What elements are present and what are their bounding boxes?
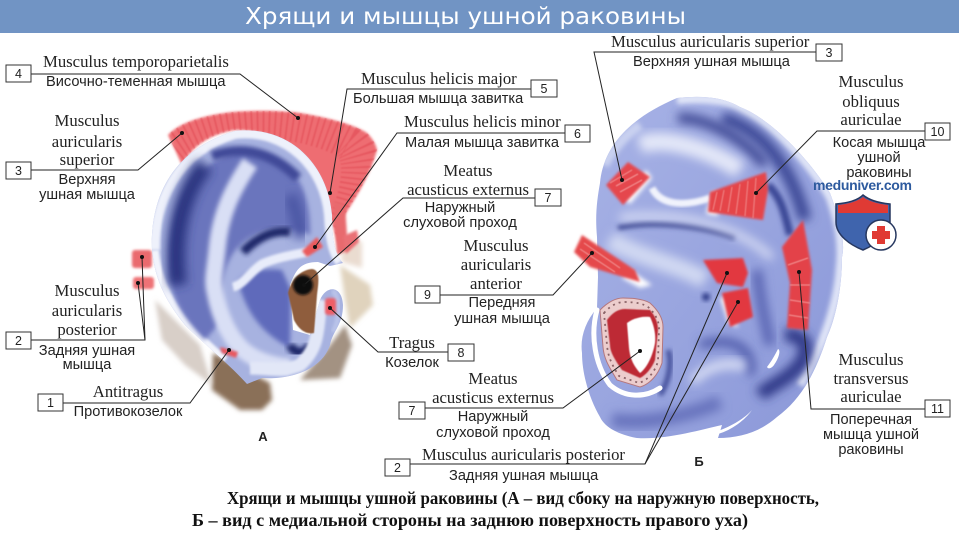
callout 7: Meatus acusticus externus (A): Наружный <box>425 200 495 216</box>
callout 2: Musculus auricularis posterior (A): auricularis <box>52 301 122 320</box>
callout 3: Musculus auricularis superior (A): Верхняя <box>59 172 115 188</box>
callout 1: Antitragus: 1 <box>47 396 54 410</box>
muscle: auricularis superior <box>606 162 652 205</box>
callout 3: Musculus auricularis superior (B): Верхняя ушная мышца <box>633 54 791 70</box>
caption: Хрящи и мышцы ушной раковины (А – вид сбоку на наружную поверхность, <box>227 488 819 508</box>
muscle: auricularis anterior <box>574 235 652 288</box>
callout 9: Musculus auricularis anterior: 9 <box>424 288 431 302</box>
caption: Б – вид с медиальной стороны на заднюю поверхность правого уха) <box>192 510 748 530</box>
callout 11: Musculus transversus auriculae <box>797 270 950 458</box>
callout 11: Musculus transversus auriculae: 11 <box>931 402 944 416</box>
muscle: transversus auriculae <box>782 220 812 330</box>
cartilage <box>152 130 343 384</box>
callout 8: Tragus: 8 <box>458 346 465 360</box>
muscle: tragus <box>325 298 336 315</box>
callout 10: Musculus obliquus auriculae: ушной <box>857 150 901 166</box>
muscles: auricularis posterior <box>132 250 154 289</box>
callout 7: Meatus acusticus externus (A) <box>302 161 561 287</box>
callout 2: Musculus auricularis posterior (A): 2 <box>15 334 22 348</box>
ear canal <box>288 269 318 333</box>
callout 8: Tragus: Tragus <box>389 333 435 352</box>
callout 2: Musculus auricularis posterior (B): 2 <box>394 461 401 475</box>
callout 2: Musculus auricularis posterior (A) <box>6 255 145 373</box>
callout 2: Musculus auricularis posterior (A): Задняя ушная <box>39 343 135 359</box>
muscle: helicis minor <box>302 237 323 257</box>
label: A: А <box>258 429 268 444</box>
white rim around meatus <box>594 310 660 395</box>
muscle: lower fan strip <box>333 200 348 255</box>
callout 3: Musculus auricularis superior (A): Musculus <box>55 111 119 130</box>
callout 11: Musculus transversus auriculae: transversus <box>833 369 909 388</box>
callout 3: Musculus auricularis superior (B) <box>594 32 842 182</box>
callout 5: Musculus helicis major: Musculus helicis major <box>361 69 517 88</box>
callout 3: Musculus auricularis superior (A): 3 <box>15 164 22 178</box>
callout 3: Musculus auricularis superior (B): Musculus auricularis superior <box>611 32 810 51</box>
callout 4: Musculus temporoparietalis <box>6 52 300 120</box>
callout 1: Antitragus: Antitragus <box>93 382 163 401</box>
callout 3: Musculus auricularis superior (A): superior <box>60 150 115 169</box>
callout 11: Musculus transversus auriculae: мышца ушной <box>823 427 919 443</box>
callout 10: Musculus obliquus auriculae: раковины <box>846 165 912 181</box>
callout 6: Musculus helicis minor: 6 <box>574 127 581 141</box>
callout 9: Musculus auricularis anterior: ушная мышца <box>454 311 551 327</box>
callout 9: Musculus auricularis anterior: Musculus <box>464 236 528 255</box>
callout 10: Musculus obliquus auriculae: Musculus <box>839 72 903 91</box>
callout 6: Musculus helicis minor: Малая мышца завитка <box>405 135 560 151</box>
callout 7: Meatus acusticus externus (B): acusticus externus <box>432 388 554 407</box>
watermark: meduniver.com: meduniver.com <box>813 177 912 193</box>
callout 10: Musculus obliquus auriculae: obliquus <box>842 92 900 111</box>
muscle: temporoparietalis fan <box>168 111 377 252</box>
callout 11: Musculus transversus auriculae: Поперечная <box>830 412 912 428</box>
callout 11: Musculus transversus auriculae: Musculus <box>839 350 903 369</box>
callout 6: Musculus helicis minor <box>313 112 590 249</box>
illustration: ear A lateral view <box>132 111 377 410</box>
callout 7: Meatus acusticus externus (A): 7 <box>545 191 552 205</box>
callout 2: Musculus auricularis posterior (A): Musculus <box>55 281 119 300</box>
callout 7: Meatus acusticus externus (B) <box>399 349 642 441</box>
callout 2: Musculus auricularis posterior (B): Musculus auricularis posterior <box>422 445 625 464</box>
callout 2: Musculus auricularis posterior (B): Задняя ушная мышца <box>449 468 599 484</box>
callout 9: Musculus auricularis anterior <box>415 236 594 327</box>
muscle: antitragus <box>220 347 238 358</box>
callout 5: Musculus helicis major: 5 <box>541 82 548 96</box>
callout 8: Tragus: Козелок <box>385 355 440 371</box>
callout 11: Musculus transversus auriculae: раковины <box>838 442 904 458</box>
callout 9: Musculus auricularis anterior: auricularis <box>461 255 531 274</box>
muscle: obliquus auriculae <box>706 172 768 220</box>
callout 2: Musculus auricularis posterior (A): мышца <box>63 357 112 373</box>
title bar <box>0 0 959 33</box>
callout 2: Musculus auricularis posterior (B) <box>385 271 740 484</box>
illustration: ear B medial view <box>574 97 843 438</box>
callout 10: Musculus obliquus auriculae <box>754 72 950 195</box>
callout 3: Musculus auricularis superior (A): auricularis <box>52 132 122 151</box>
callout 10: Musculus obliquus auriculae: 10 <box>931 125 944 139</box>
title bar: Хрящи и мышцы ушной раковины <box>245 4 686 30</box>
callout 4: Musculus temporoparietalis: Височно-теменная мышца <box>46 74 226 90</box>
callout 7: Meatus acusticus externus (B): Наружный <box>458 409 528 425</box>
callout 5: Musculus helicis major <box>328 69 557 195</box>
callout 3: Musculus auricularis superior (A): ушная мышца <box>39 187 136 203</box>
muscles: auricularis posterior <box>703 258 753 328</box>
callout 7: Meatus acusticus externus (A): слуховой проход <box>403 215 517 231</box>
surrounding tissue <box>155 238 373 410</box>
callout 3: Musculus auricularis superior (B): 3 <box>826 46 833 60</box>
callout 4: Musculus temporoparietalis: 4 <box>15 67 22 81</box>
slit near lobule <box>767 349 779 368</box>
callout 4: Musculus temporoparietalis: Musculus temporoparietalis <box>43 52 229 71</box>
callout 7: Meatus acusticus externus (B): 7 <box>409 404 416 418</box>
callout 3: Musculus auricularis superior (A) <box>6 111 184 203</box>
callout 2: Musculus auricularis posterior (A): posterior <box>57 320 117 339</box>
callout 9: Musculus auricularis anterior: anterior <box>470 274 522 293</box>
caption <box>192 488 819 530</box>
callout 9: Musculus auricularis anterior: Передняя <box>469 295 535 311</box>
callout 6: Musculus helicis minor: Musculus helicis minor <box>404 112 561 131</box>
meatus ring <box>600 298 663 387</box>
callout 1: Antitragus <box>38 348 231 420</box>
callout 10: Musculus obliquus auriculae: auriculae <box>840 110 902 129</box>
callout 5: Musculus helicis major: Большая мышца завитка <box>353 91 524 107</box>
callout 7: Meatus acusticus externus (B): Meatus <box>468 369 518 388</box>
label: B: Б <box>694 454 704 469</box>
callout 7: Meatus acusticus externus (B): слуховой проход <box>436 425 550 441</box>
callout 1: Antitragus: Противокозелок <box>74 404 183 420</box>
callout 7: Meatus acusticus externus (A): acusticus externus <box>407 180 529 199</box>
callout 11: Musculus transversus auriculae: auriculae <box>840 387 902 406</box>
callout 8: Tragus <box>328 306 474 371</box>
callout 10: Musculus obliquus auriculae: Косая мышца <box>833 135 926 151</box>
icon: medical shield <box>836 195 896 250</box>
callout 7: Meatus acusticus externus (A): Meatus <box>443 161 493 180</box>
